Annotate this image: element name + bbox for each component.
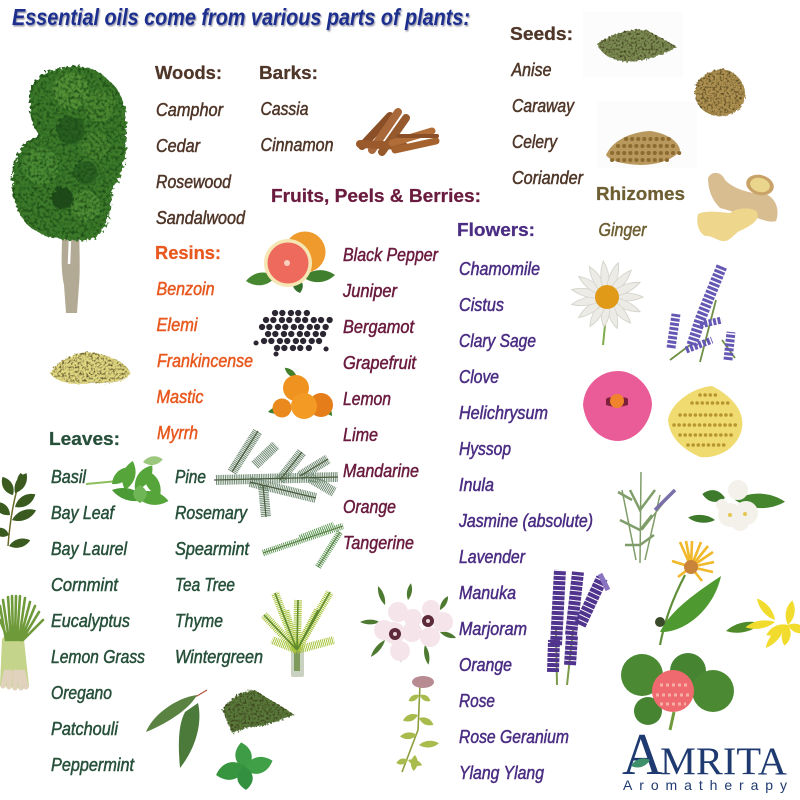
heading: barks: Barks: [259, 62, 318, 83]
icon: tree [12, 66, 126, 313]
icon: rosemary sprig [263, 525, 343, 567]
flower items: Jasmine (absolute) [458, 511, 593, 531]
icon: pine branch [214, 431, 338, 517]
seeds items [511, 60, 584, 188]
fruit items: Black Pepper [343, 245, 439, 265]
panel: fruits, peels and berries list [271, 185, 481, 553]
icon: fennel seed pile [583, 12, 683, 77]
flower items: Marjoram [459, 619, 527, 639]
flower items: Rose [459, 691, 495, 711]
flower items: Ylang Ylang [459, 763, 544, 783]
flower items: Helichrysum [459, 403, 548, 423]
leaves column one: Cornmint [51, 575, 119, 595]
panel: woods list [155, 62, 246, 228]
icon: chamomile daisy [571, 261, 643, 345]
flower items: Manuka [459, 583, 516, 603]
heading: fruits: Fruits, Peels & Berries: [271, 185, 481, 206]
heading: seeds: Seeds: [510, 23, 573, 44]
fruit items: Orange [343, 497, 396, 517]
barks items [260, 99, 334, 155]
leaves column one: Lemon Grass [51, 647, 145, 667]
leaves column two: Thyme [175, 611, 223, 631]
seeds items: Anise [511, 60, 552, 80]
leaves column one: Oregano [51, 683, 112, 703]
icon: black pepper [256, 313, 331, 354]
flower items [458, 259, 593, 783]
icon: wintergreen sprig in glass [264, 592, 334, 677]
icon: mint [214, 741, 275, 791]
icon: cistus pink flower [583, 371, 652, 441]
flower items: Hyssop [459, 439, 511, 459]
icon: frankincense resin [50, 352, 130, 384]
logo leaf [630, 756, 651, 770]
leaves column two: Tea Tree [175, 575, 235, 595]
fruit items [342, 245, 439, 553]
icon: eucalyptus leaves [146, 690, 207, 768]
logo: Amrita Aromatherapy [622, 721, 787, 793]
rhizomes item: Ginger [598, 220, 647, 240]
fruit items: Tangerine [343, 533, 414, 553]
leaves column one: Bay Leaf [51, 503, 116, 523]
panel: rhizomes list [596, 183, 685, 240]
flower items: Cistus [459, 295, 504, 315]
flower items: Clove [459, 367, 499, 387]
flower items: Inula [459, 475, 494, 495]
icon: thyme bundle [222, 690, 295, 733]
fruit items: Bergamot [343, 317, 415, 337]
fruit items: Lime [343, 425, 378, 445]
icon: coriander seed pile [597, 102, 697, 168]
leaves column one: Bay Laurel [51, 539, 128, 559]
seeds items: Coriander [512, 168, 584, 188]
woods items: Camphor [156, 100, 224, 120]
heading: woods: Woods: [155, 62, 222, 83]
icon: rose geranium [621, 653, 734, 730]
logo wordmark remainder: MRITA [660, 740, 787, 783]
fruit items: Lemon [343, 389, 391, 409]
icon: clary sage [670, 266, 735, 362]
leaves column two [175, 467, 263, 667]
seeds items: Celery [512, 132, 558, 152]
icon: ground seed pile [695, 69, 745, 116]
leaves column one: Eucalyptus [51, 611, 130, 631]
panel: resins list [155, 242, 253, 443]
panel: flowers list [457, 219, 593, 783]
leaves column one: Basil [51, 467, 87, 487]
leaves column one: Peppermint [51, 755, 135, 775]
leaves column two: Rosemary [175, 503, 248, 523]
icon: jasmine [688, 480, 785, 531]
barks items: Cassia [260, 99, 308, 119]
icon: inula [655, 541, 721, 645]
seeds items: Caraway [512, 96, 575, 116]
barks items: Cinnamon [260, 135, 334, 155]
icon: hyssop herb [618, 472, 675, 563]
icon: lavender [553, 570, 608, 685]
flower items: Rose Geranium [459, 727, 569, 747]
woods items: Rosewood [156, 172, 232, 192]
resins items: Mastic [156, 387, 204, 407]
leaves column one: Patchouli [51, 719, 119, 739]
panel: barks list [259, 62, 334, 155]
woods items: Sandalwood [156, 208, 246, 228]
resins items [156, 279, 253, 443]
heading: rhizomes: Rhizomes [596, 183, 685, 204]
resins items: Myrrh [157, 423, 198, 443]
fruit items: Juniper [342, 281, 398, 301]
fruit items: Grapefruit [343, 353, 417, 373]
icon: basil [86, 455, 170, 508]
woods items: Cedar [156, 136, 201, 156]
heading: flowers: Flowers: [457, 219, 535, 240]
icon: ginger root [697, 172, 778, 241]
flower items: Orange [459, 655, 512, 675]
logo subtitle: Aromatherapy [623, 777, 787, 793]
panel: seeds list [510, 23, 584, 188]
icon: grapefruit [245, 232, 335, 294]
resins items: Benzoin [156, 279, 214, 299]
logo wordmark: A [622, 721, 663, 787]
icon: marjoram sprig [396, 676, 439, 772]
icon: manuka flowers [360, 583, 457, 665]
icon: compound bay leaf [0, 471, 38, 550]
leaves column one [51, 467, 145, 775]
icon: cinnamon sticks [360, 112, 437, 152]
title: Essential oils come from various parts of plants: [12, 4, 470, 30]
icon: lemongrass bundle [0, 596, 43, 688]
heading: resins: Resins: [155, 242, 221, 263]
icon: helichrysum [668, 386, 742, 457]
flower items: Clary Sage [459, 331, 536, 351]
heading: leaves: Leaves: [49, 428, 120, 449]
fruit items: Mandarine [343, 461, 419, 481]
flower items: Lavender [459, 547, 526, 567]
woods items [156, 100, 246, 228]
panel: leaves list [49, 428, 263, 775]
leaves column two: Pine [175, 467, 206, 487]
leaves column two: Spearmint [175, 539, 250, 559]
flower items: Chamomile [459, 259, 540, 279]
icon: oranges [267, 366, 335, 419]
resins items: Frankincense [157, 351, 253, 371]
leaves column two: Wintergreen [175, 647, 263, 667]
resins items: Elemi [156, 315, 198, 335]
icon: ylang ylang [725, 596, 800, 650]
